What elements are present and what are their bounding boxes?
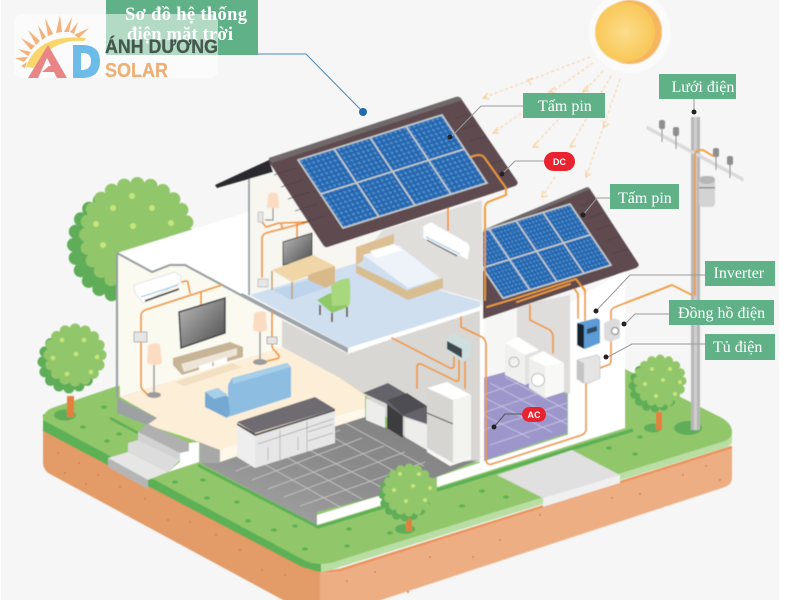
label: đồng hồ điện xyxy=(669,300,774,325)
grass dots xyxy=(80,405,643,551)
logo name: ÁNH DƯƠNG xyxy=(105,36,218,58)
leader: DC xyxy=(500,161,544,176)
stairs xyxy=(108,424,199,489)
dryer xyxy=(505,337,539,385)
chair xyxy=(317,278,350,322)
patio floor xyxy=(200,417,478,525)
tv cabinet xyxy=(173,342,243,375)
washing machine xyxy=(529,351,564,398)
refrigerator xyxy=(427,382,471,466)
soil top edge xyxy=(43,430,732,571)
solar array second xyxy=(462,204,611,298)
patio ledge xyxy=(317,495,382,525)
laundry back wall xyxy=(517,295,570,394)
roof shingle lines xyxy=(274,114,510,223)
air conditioner upper xyxy=(423,222,470,260)
AC badge: AC xyxy=(528,410,541,420)
leader: tủ điện xyxy=(604,344,705,360)
electrical cabinet xyxy=(577,355,600,384)
logo sun rays xyxy=(15,15,89,68)
leader: đồng hồ điện xyxy=(622,314,669,326)
logo xyxy=(14,14,218,82)
soil right face xyxy=(320,446,732,600)
wire over main roof xyxy=(471,155,506,195)
title: Sơ đồ hệ thống xyxy=(125,5,248,25)
outlet xyxy=(258,279,268,287)
label: tủ điện: Tủ điện xyxy=(713,339,762,356)
divider column xyxy=(480,300,484,463)
wires xyxy=(141,150,713,464)
wall distribution panel xyxy=(446,334,471,362)
small tree right xyxy=(633,359,682,432)
label: inverter xyxy=(705,261,775,286)
title xyxy=(106,0,258,55)
leader: tấm pin 1 xyxy=(448,106,523,140)
label: lưới điện: Lưới điện xyxy=(672,79,734,96)
monitor xyxy=(283,233,316,274)
air conditioner living xyxy=(134,272,181,303)
bed xyxy=(356,234,443,300)
wires over second roof xyxy=(485,208,585,307)
soil speckles xyxy=(57,452,721,593)
label: tấm pin 2: Tấm pin xyxy=(618,190,672,207)
foundation white base xyxy=(437,420,625,487)
white top of living wall xyxy=(117,212,248,300)
grass light band right xyxy=(321,432,732,572)
switches xyxy=(134,332,277,344)
desk xyxy=(272,255,335,299)
large tree behind house xyxy=(74,184,188,296)
second roof xyxy=(482,186,640,320)
ground block xyxy=(43,369,732,600)
upper floor slab xyxy=(250,263,480,348)
upper wall left xyxy=(250,160,383,295)
logo arc xyxy=(26,37,86,68)
sofa xyxy=(205,363,291,418)
transformer xyxy=(699,176,715,207)
label: lưới điện xyxy=(659,74,736,99)
front tree xyxy=(383,468,432,534)
grass dark strip along house xyxy=(437,430,633,490)
leader: AC xyxy=(492,414,522,430)
AC badge xyxy=(522,407,546,422)
label: tủ điện xyxy=(705,334,775,360)
DC badge xyxy=(544,152,575,171)
leader: inverter xyxy=(594,275,705,314)
leader: lưới điện xyxy=(692,99,696,114)
grass top xyxy=(43,369,732,564)
right wall xyxy=(568,270,625,440)
insulators xyxy=(659,120,733,165)
rug shadow under desk xyxy=(273,280,325,300)
label: tấm pin 2 xyxy=(610,184,679,209)
paved path xyxy=(497,450,620,507)
sun rays xyxy=(483,57,620,197)
title: điện mặt trời xyxy=(127,25,233,45)
furniture upper room xyxy=(258,192,470,322)
floor lamp right xyxy=(253,311,267,365)
small tree left xyxy=(43,329,101,420)
utility pole xyxy=(647,117,743,435)
label: tấm pin 1: Tấm pin xyxy=(538,98,592,115)
house xyxy=(117,160,625,525)
living floor xyxy=(120,347,365,462)
living back wall xyxy=(117,253,282,397)
label: đồng hồ điện: Đồng hồ điện xyxy=(678,305,765,322)
DC badge: DC xyxy=(553,157,566,167)
upper wall right xyxy=(357,200,482,307)
solar array main xyxy=(298,115,487,228)
soil left face xyxy=(43,428,330,600)
logo solar: SOLAR xyxy=(105,60,169,82)
main roof xyxy=(215,97,518,247)
sun xyxy=(589,0,671,73)
label: inverter: Inverter xyxy=(714,265,765,282)
grass dark band left xyxy=(43,414,321,572)
kitchen back wall xyxy=(282,308,482,462)
kitchen island xyxy=(237,397,335,468)
wall lamp xyxy=(258,192,279,222)
inverter xyxy=(577,318,600,349)
electric meter xyxy=(604,318,620,342)
tv cabinet rug xyxy=(175,363,242,386)
television xyxy=(179,298,225,348)
logo letter D xyxy=(73,45,100,78)
logo letter A xyxy=(28,45,67,78)
laundry purple floor xyxy=(483,372,567,461)
leader: title xyxy=(258,54,367,116)
foundation grey xyxy=(117,398,157,425)
patio tile lines xyxy=(236,423,425,508)
kitchen back counter and stove xyxy=(363,383,427,450)
floor lamp left xyxy=(147,343,162,398)
leader: tấm pin 2 xyxy=(580,198,610,218)
furniture living room xyxy=(134,272,291,418)
label: tấm pin 1 xyxy=(523,93,605,118)
